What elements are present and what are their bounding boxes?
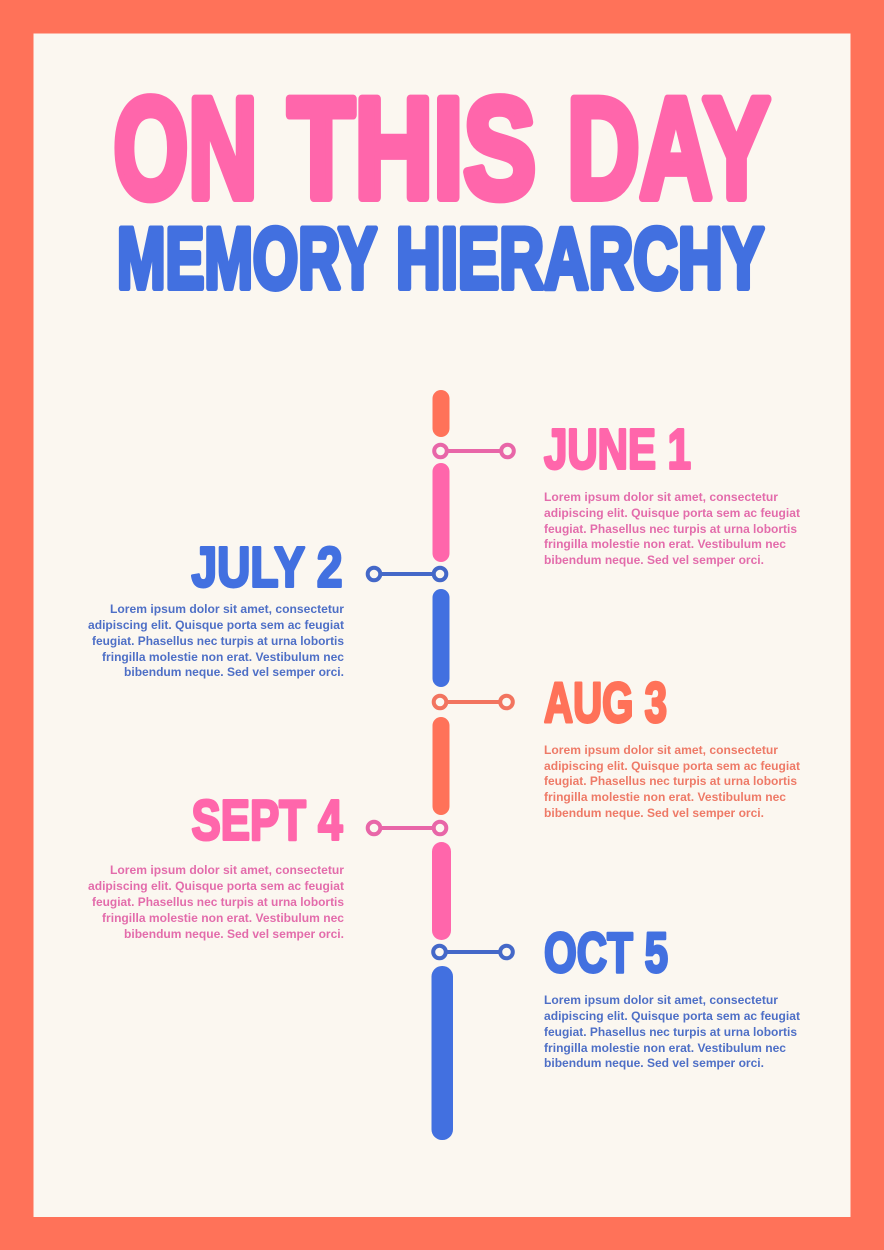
text block: Oct 5: Lorem ipsum dolor sit amet, consectetur <box>544 994 778 1007</box>
timeline <box>432 390 453 1140</box>
text block: Oct 5 <box>544 994 800 1070</box>
connector: Sept 4 <box>368 822 446 834</box>
connector: Aug 3 <box>434 696 513 708</box>
title: DAY <box>567 70 770 228</box>
text block: July 2: bibendum neque. Sed vel semper orci. <box>124 666 344 679</box>
connector: July 2 <box>368 568 446 580</box>
text block: Aug 3: adipiscing elit. Quisque porta sem ac feugiat <box>544 760 800 773</box>
connector: Oct 5 <box>433 946 513 958</box>
date: Oct 5: OCT 5 <box>544 921 668 985</box>
text block: Aug 3: fringilla molestie non erat. Vestibulum nec <box>544 791 787 804</box>
text block: June 1: adipiscing elit. Quisque porta sem ac feugiat <box>544 507 800 520</box>
text block: Aug 3 <box>544 744 800 820</box>
title: ON <box>114 70 258 228</box>
text block: Sept 4: adipiscing elit. Quisque porta sem ac feugiat <box>88 880 344 893</box>
text block: July 2: adipiscing elit. Quisque porta sem ac feugiat <box>88 619 344 632</box>
date: Aug 3: AUG 3 <box>544 671 667 735</box>
text block: June 1: bibendum neque. Sed vel semper orci. <box>544 554 764 567</box>
title: THIS <box>288 70 536 228</box>
text block: Oct 5: fringilla molestie non erat. Vestibulum nec <box>544 1042 787 1055</box>
text block: June 1: feugiat. Phasellus nec turpis at urna lobortis <box>544 523 797 536</box>
subtitle <box>117 211 764 307</box>
text block: July 2: Lorem ipsum dolor sit amet, consectetur <box>110 603 344 616</box>
date: July 2: JULY 2 <box>192 536 342 600</box>
title <box>114 70 770 228</box>
text block: June 1: Lorem ipsum dolor sit amet, consectetur <box>544 491 778 504</box>
text block: July 2: fringilla molestie non erat. Vestibulum nec <box>102 651 345 664</box>
text block: Aug 3: bibendum neque. Sed vel semper orci. <box>544 807 764 820</box>
text block: Sept 4: Lorem ipsum dolor sit amet, consectetur <box>110 864 344 877</box>
text block: July 2: feugiat. Phasellus nec turpis at urna lobortis <box>92 635 344 648</box>
text block: Sept 4: bibendum neque. Sed vel semper orci. <box>124 928 344 941</box>
text block: June 1: fringilla molestie non erat. Vestibulum nec <box>544 538 787 551</box>
text block: July 2 <box>88 603 345 679</box>
text block: Sept 4: feugiat. Phasellus nec turpis at urna lobortis <box>92 896 344 909</box>
text block: Oct 5: adipiscing elit. Quisque porta sem ac feugiat <box>544 1010 800 1023</box>
date: Sept 4: SEPT 4 <box>192 788 343 852</box>
date: June 1: JUNE 1 <box>544 418 691 482</box>
text block: Oct 5: bibendum neque. Sed vel semper orci. <box>544 1057 764 1070</box>
text block: Oct 5: feugiat. Phasellus nec turpis at urna lobortis <box>544 1026 797 1039</box>
text block: Aug 3: feugiat. Phasellus nec turpis at urna lobortis <box>544 775 797 788</box>
text block: Sept 4: fringilla molestie non erat. Vestibulum nec <box>102 912 345 925</box>
text block: Sept 4 <box>88 864 345 941</box>
connector: June 1 <box>434 445 514 457</box>
text block: June 1 <box>544 491 800 567</box>
subtitle: MEMORY <box>117 211 377 307</box>
text block: Aug 3: Lorem ipsum dolor sit amet, consectetur <box>544 744 778 757</box>
